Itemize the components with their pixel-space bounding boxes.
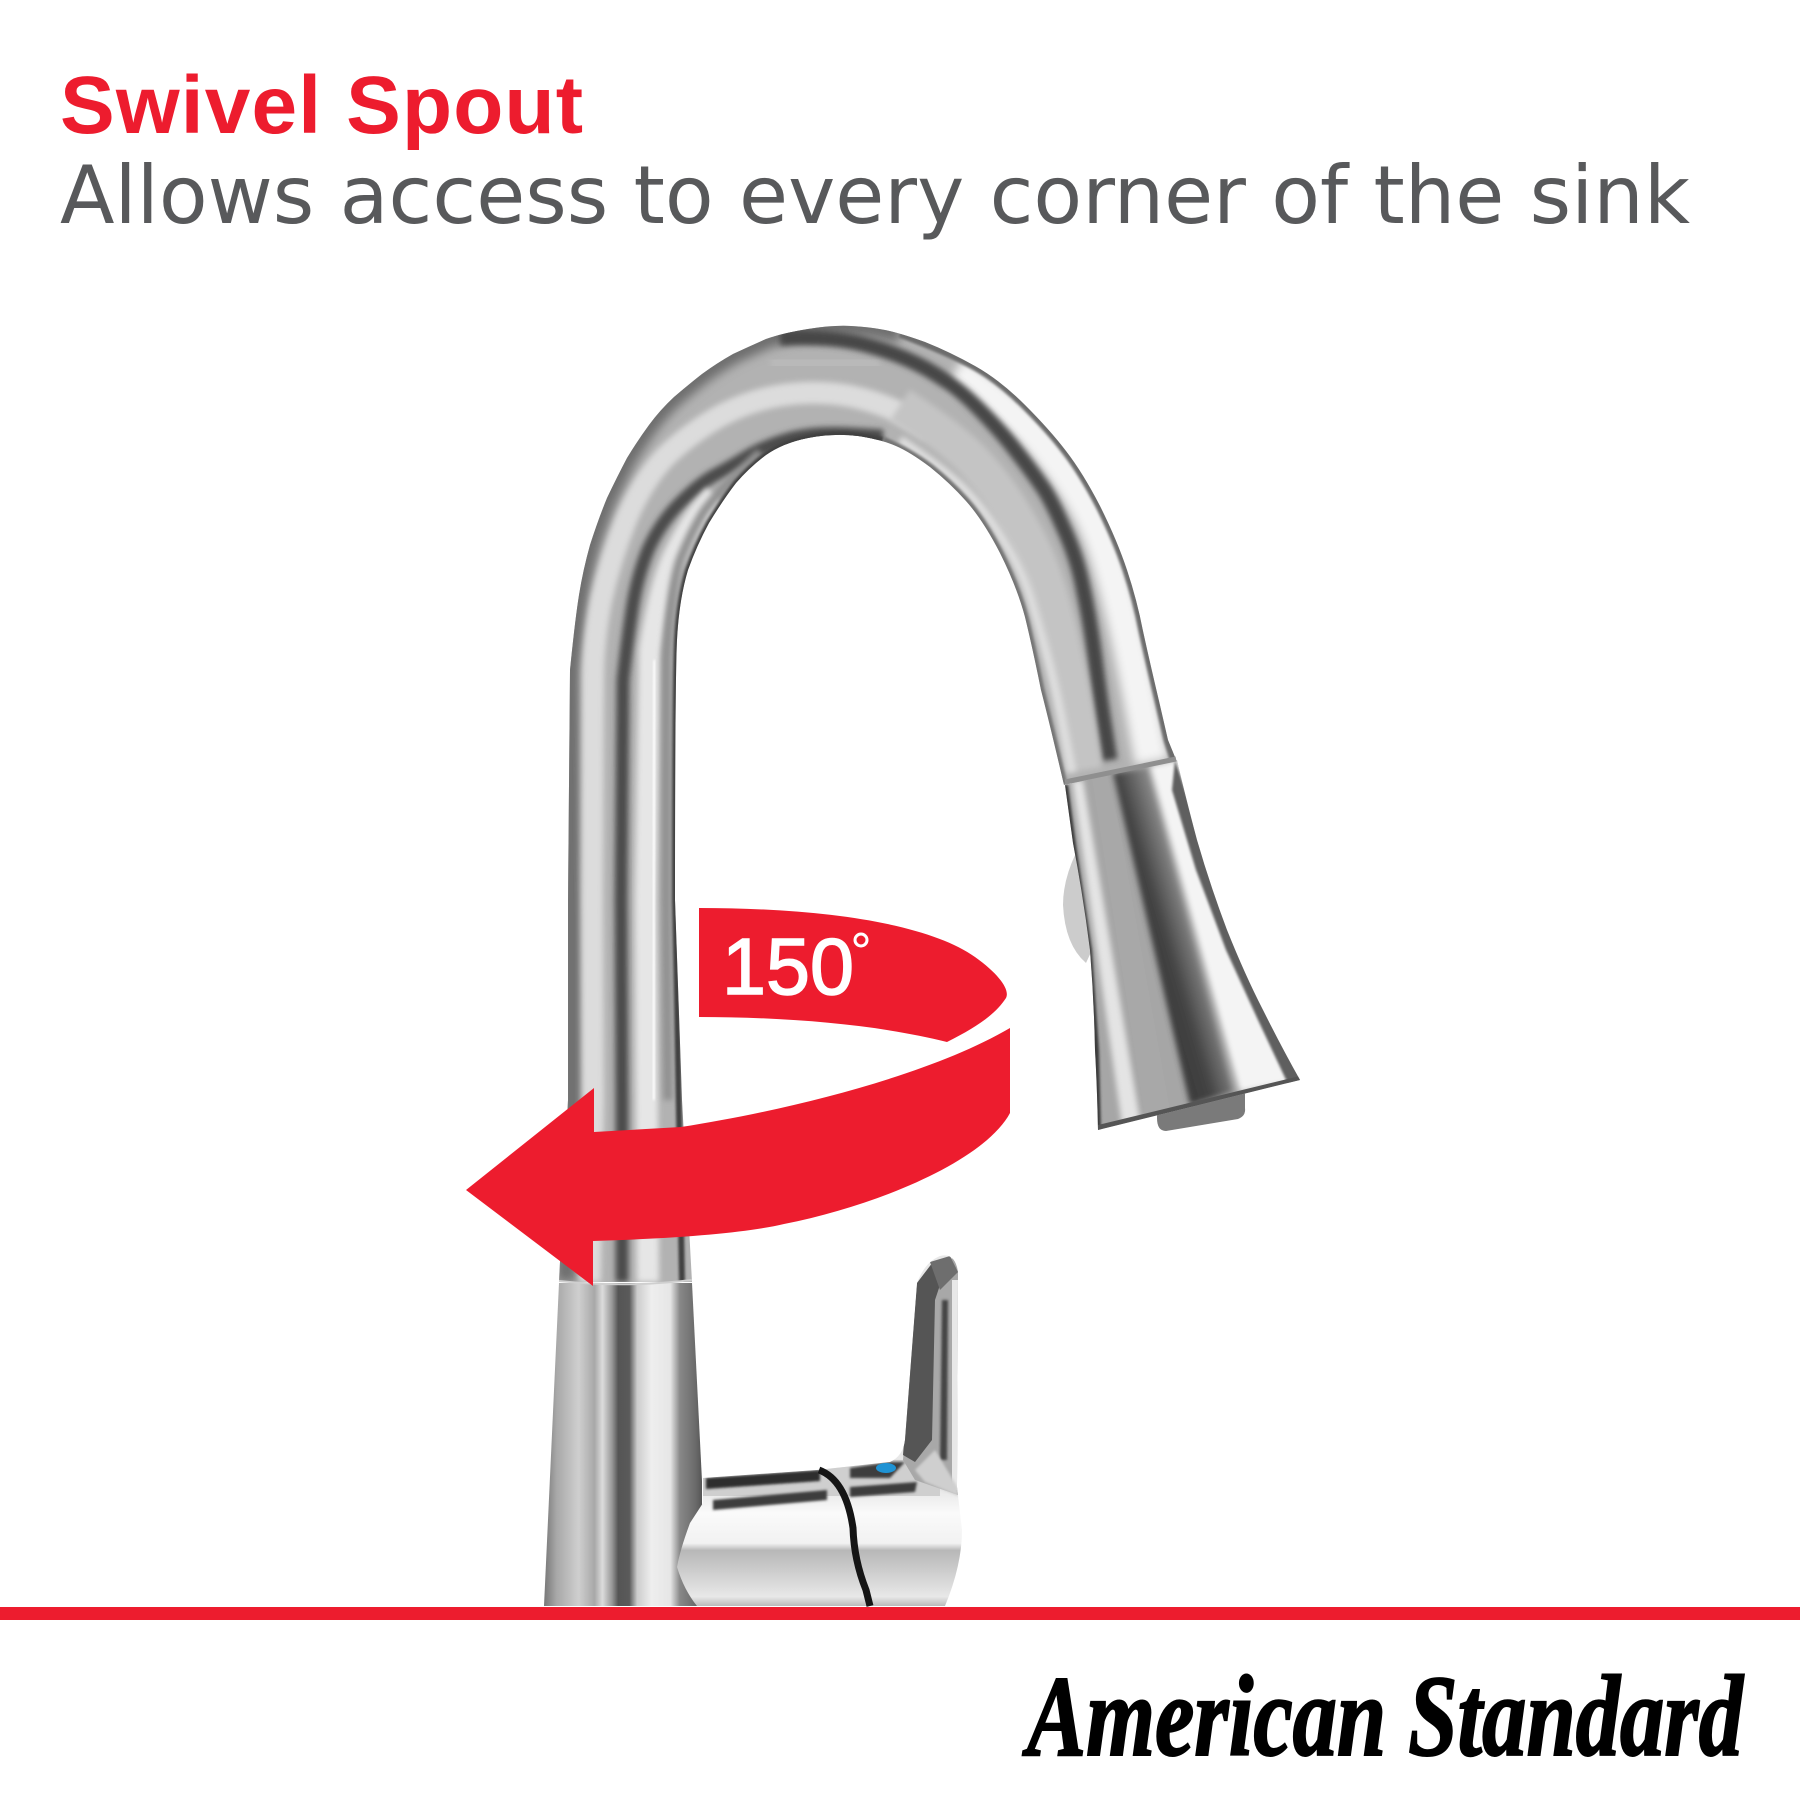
upper arrow band [699,908,1007,1042]
red rotation arrow [466,908,1010,1286]
temperature indicator blue dot [876,1463,896,1473]
lower arrow band with head [466,1028,1010,1286]
faucet base column [540,1283,710,1608]
red divider line [0,1607,1800,1620]
handle seam [819,1470,870,1606]
spout collar [1065,759,1176,782]
faucet spout tube [559,326,1176,1282]
subtitle: Allows access to every corner of the sink [60,149,1691,242]
spray head [1065,760,1300,1130]
aerator [1157,1088,1245,1131]
faucet illustration [540,300,1310,1610]
faucet handle [670,1250,970,1610]
degree sign [855,934,867,946]
title: Swivel Spout: Swivel Spout [60,60,583,151]
swivel ring line [559,1280,692,1284]
spray head button [1063,850,1092,963]
150 degrees label: 150 [722,922,854,1011]
